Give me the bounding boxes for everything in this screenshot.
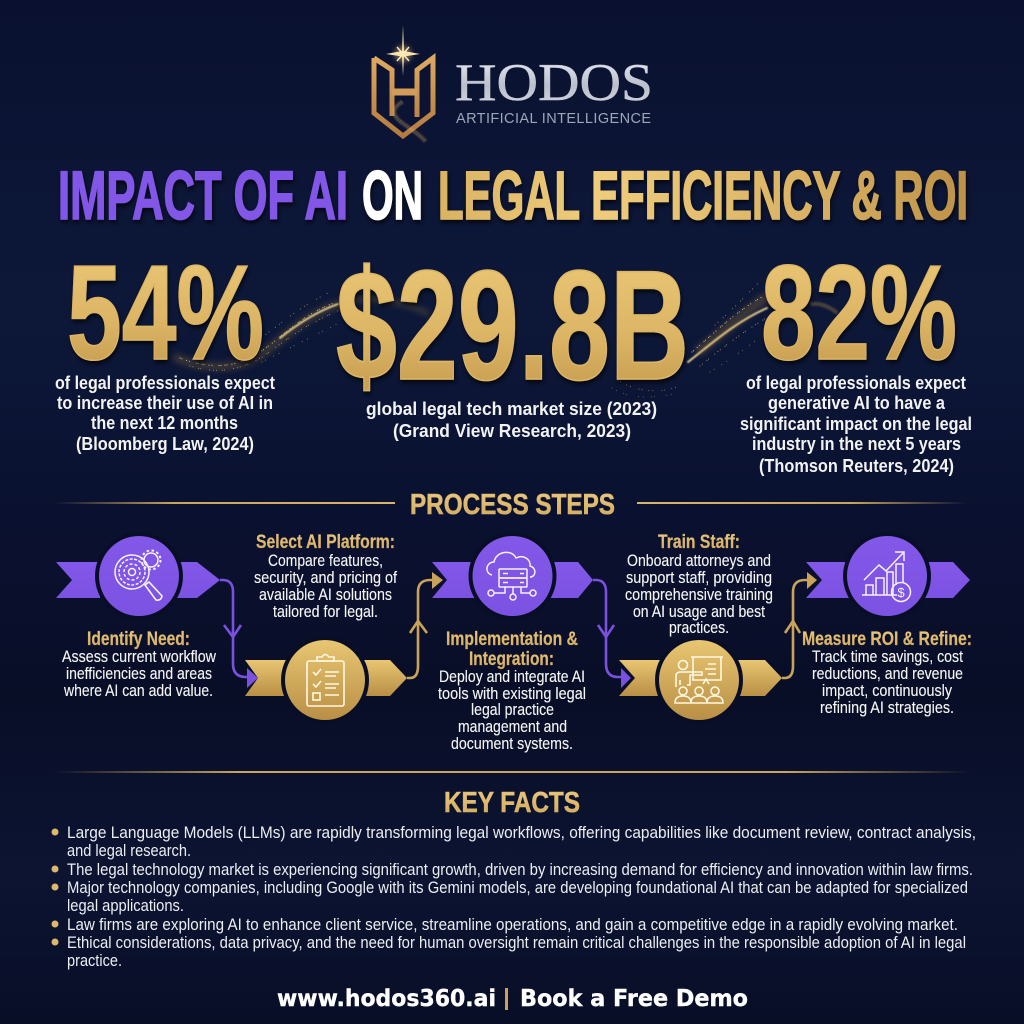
number: 54% — [67, 237, 264, 388]
icon: cloud server network — [487, 552, 536, 600]
footer call to action — [277, 986, 748, 1012]
step 5: measure ROI — [806, 532, 970, 620]
icon: growth chart and coin — [862, 552, 910, 602]
arrow: step 4 to 5 — [782, 572, 817, 678]
ribbon — [806, 562, 970, 598]
step 1 text: Identify Need: — [87, 628, 190, 650]
step 5 text: Measure ROI & Refine: — [802, 628, 972, 650]
ribbon — [619, 660, 782, 696]
step 5 text: impact, continuously — [822, 682, 953, 700]
icon: magnifier with gears — [115, 550, 162, 600]
step 4 text: Onboard attorneys and — [627, 552, 771, 570]
description: industry in the next 5 years — [752, 433, 961, 454]
stat: $29.8B — [336, 239, 689, 441]
step 2 text — [254, 531, 397, 621]
step 1 text: Assess current workflow — [62, 648, 216, 666]
footer call to action: Book a Free Demo — [520, 986, 748, 1012]
description: significant impact on the legal — [740, 413, 972, 434]
gold particle swooshes — [177, 283, 836, 397]
step 2 text: Select AI Platform: — [256, 531, 395, 553]
step 4 text: comprehensive training — [625, 586, 773, 604]
step 2: select AI platform — [245, 636, 407, 724]
wordmark: HODOS — [455, 54, 653, 112]
arrow: step 3 to 4 — [593, 580, 631, 688]
fact list: and legal research. — [67, 841, 191, 860]
description — [366, 398, 657, 441]
step 3 text: Implementation & — [446, 628, 578, 650]
step 1 text: where AI can add value. — [63, 682, 213, 700]
step 4 text: support staff, providing — [626, 569, 772, 587]
description: (Bloomberg Law, 2024) — [76, 433, 254, 454]
ribbon — [245, 660, 407, 696]
title: IMPACT OF AI — [58, 157, 348, 234]
description: to increase their use of AI in — [57, 392, 273, 413]
description — [740, 372, 972, 476]
arrow: step 2 to 3 — [407, 572, 443, 678]
step 3 text — [438, 628, 586, 753]
heading: KEY FACTS — [444, 787, 580, 819]
step 2 text: Compare features, — [268, 552, 383, 570]
step 4 text: on AI usage and best — [633, 603, 765, 621]
bullets — [52, 828, 58, 946]
stat: 54% — [55, 237, 275, 454]
icon: checklist clipboard — [307, 654, 344, 706]
step 5 text: Track time savings, cost — [812, 648, 963, 666]
fact list — [67, 823, 976, 970]
step 2 text: available AI solutions — [259, 586, 392, 604]
ribbon — [432, 562, 593, 598]
step 3: implementation and integration — [432, 532, 593, 620]
step 3 text: management and — [458, 718, 567, 736]
step 4 text: practices. — [669, 619, 729, 637]
fact list: legal applications. — [67, 896, 184, 915]
logo: Hodos — [374, 25, 653, 142]
step 1 text — [62, 628, 216, 700]
title — [58, 157, 968, 234]
step 2 text: security, and pricing of — [254, 569, 397, 587]
step 5 text — [802, 628, 972, 717]
step 3 text: legal practice — [471, 701, 554, 719]
panel: key facts — [52, 787, 976, 970]
stat: 82% — [740, 237, 972, 476]
icon: trainer and audience — [675, 657, 723, 703]
description — [55, 372, 275, 454]
step 4: train staff — [619, 636, 782, 724]
step 3 text: document systems. — [451, 735, 573, 753]
description: (Grand View Research, 2023) — [393, 420, 631, 441]
description: (Thomson Reuters, 2024) — [759, 455, 954, 476]
step 4 text: Train Staff: — [658, 531, 740, 553]
step 1 text: inefficiencies and areas — [66, 665, 212, 683]
description: global legal tech market size (2023) — [366, 398, 657, 419]
step 4 text — [625, 531, 773, 637]
step 3 text: Deploy and integrate AI — [439, 668, 585, 686]
tagline: ARTIFICIAL INTELLIGENCE — [456, 111, 651, 127]
icon: growth chart and coin: $ — [897, 585, 905, 600]
icon: shield with H and star — [374, 25, 433, 142]
step 5 text: reductions, and revenue — [812, 665, 963, 683]
step 1: identify need — [56, 532, 220, 620]
description: generative AI to have a — [768, 392, 946, 413]
step 2 text: tailored for legal. — [273, 603, 378, 621]
footer call to action: www.hodos360.ai — [277, 986, 496, 1012]
step 3 text: Integration: — [469, 648, 554, 670]
number: $29.8B — [336, 239, 689, 413]
title: ON — [362, 157, 423, 234]
description: of legal professionals expect — [746, 372, 966, 393]
process flow — [56, 531, 972, 753]
step 5 text: refining AI strategies. — [820, 699, 954, 717]
number: 82% — [761, 237, 957, 388]
ribbon — [56, 562, 220, 598]
fact list: practice. — [67, 951, 122, 970]
description: of legal professionals expect — [55, 372, 275, 393]
heading: process steps: PROCESS STEPS — [410, 489, 615, 521]
step 3 text: tools with existing legal — [438, 685, 586, 703]
arrow: step 1 to 2 — [220, 580, 258, 688]
description: the next 12 months — [91, 412, 238, 433]
